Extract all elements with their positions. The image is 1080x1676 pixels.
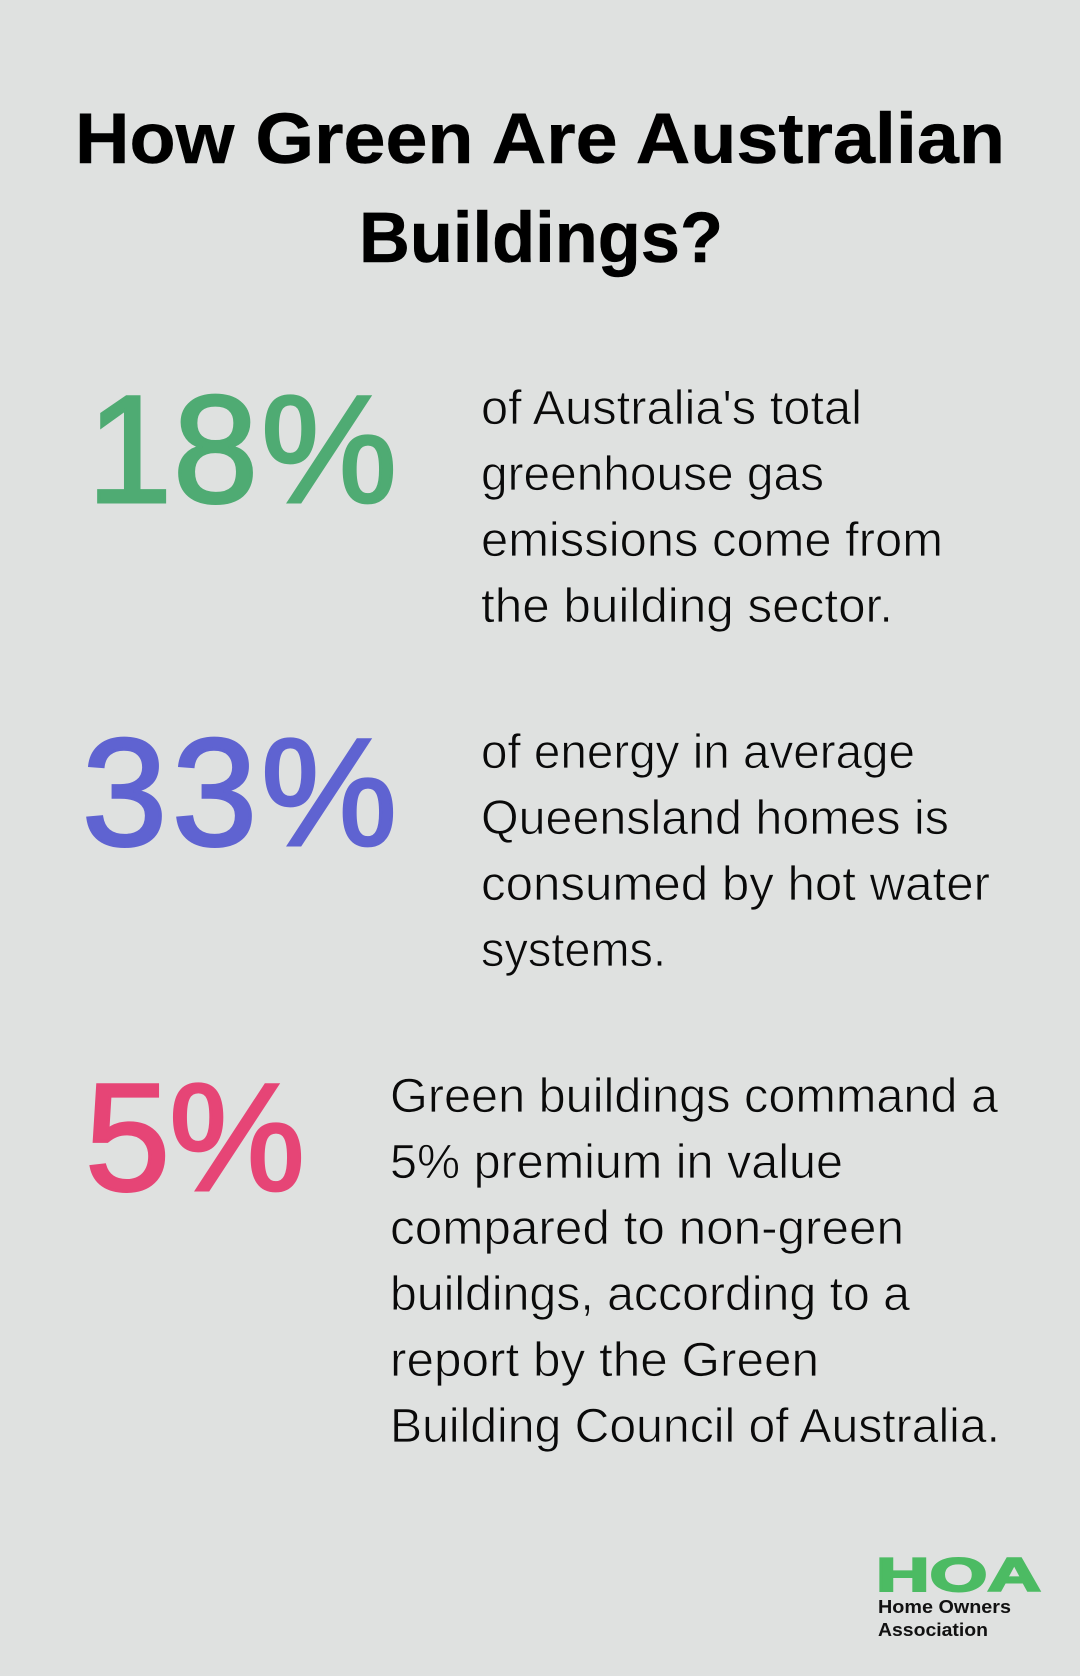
text block: hot water description (481, 726, 990, 977)
stat: 33%: 33% (82, 707, 397, 878)
text block: emissions description: greenhouse gas (481, 448, 824, 501)
logo wordmark: Home Owners (878, 1597, 1011, 1617)
text block: premium description: Green buildings command a (390, 1070, 998, 1123)
logo wordmark: Association (878, 1620, 988, 1640)
text block: premium description: buildings, according to a (390, 1268, 910, 1321)
text block: emissions description: the building sector. (481, 580, 893, 633)
title (75, 100, 1005, 278)
panel: building sector emissions (87, 364, 943, 633)
text block: premium description: 5% premium in value (390, 1136, 843, 1189)
panel: green building premium (85, 1052, 1000, 1453)
text block: hot water description: consumed by hot water (481, 858, 990, 911)
text block: premium description: compared to non-green (390, 1202, 904, 1255)
text block: hot water description: of energy in average (481, 726, 915, 779)
text block: premium description: Building Council of Australia. (390, 1400, 1000, 1453)
text block: emissions description: emissions come from (481, 514, 943, 567)
title: How Green Are Australian (75, 100, 1005, 179)
logo wordmark (878, 1597, 1011, 1640)
text block: premium description (390, 1070, 1000, 1453)
title: Buildings? (359, 199, 723, 278)
text block: premium description: report by the Green (390, 1334, 819, 1387)
logo mark: HOA: HOA (876, 1548, 1041, 1601)
text block: emissions description (481, 382, 943, 633)
logo: Home Owners Association (876, 1548, 1041, 1640)
text block: emissions description: of Australia's total (481, 382, 862, 435)
text block: hot water description: Queensland homes is (481, 792, 949, 845)
stat: 5%: 5% (85, 1052, 305, 1223)
text block: hot water description: systems. (481, 924, 666, 977)
stat: 18%: 18% (87, 364, 397, 535)
panel: hot water energy use (82, 707, 990, 977)
